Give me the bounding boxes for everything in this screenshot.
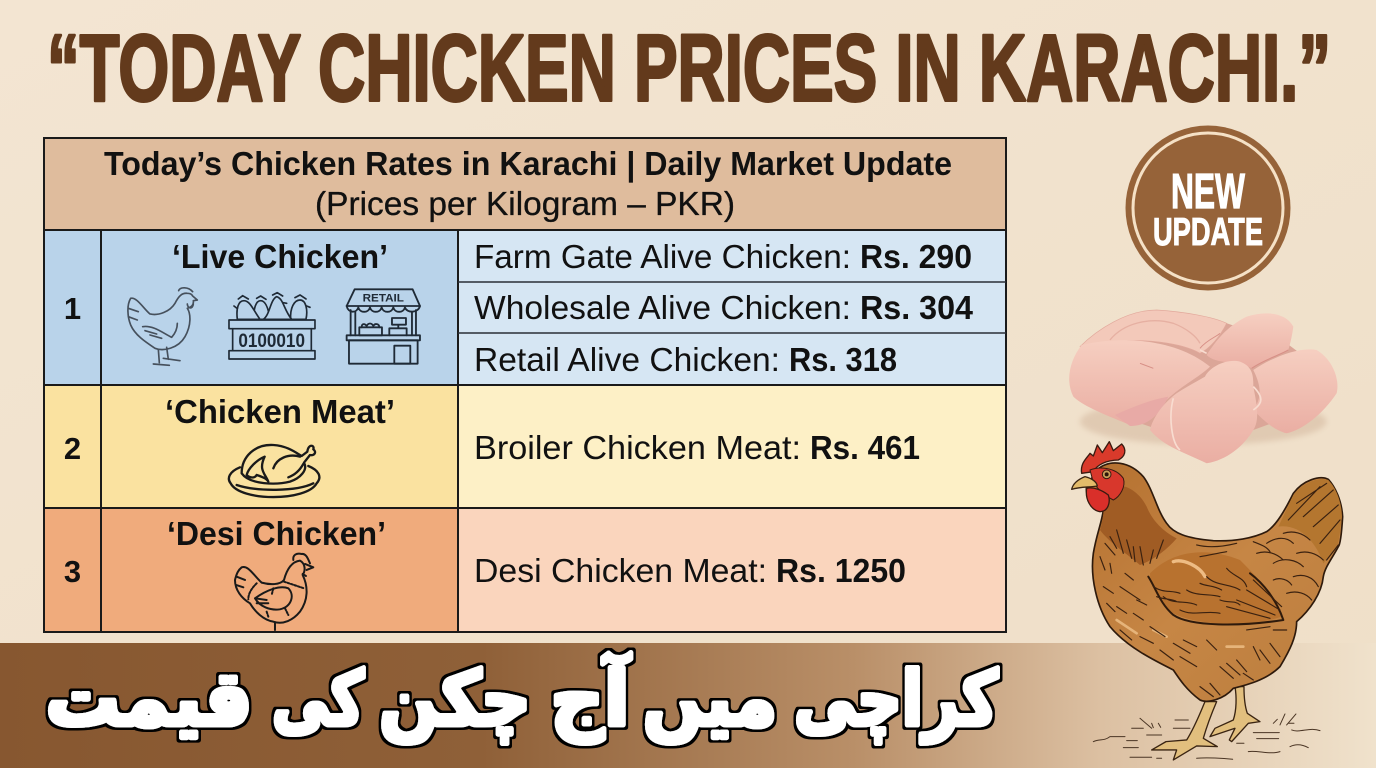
urdu banner heading: قیمت	[46, 655, 252, 743]
hen wattle	[1086, 488, 1109, 512]
icon: retail stall: RETAIL	[363, 293, 404, 305]
price: desi meat: Desi Chicken Meat:	[474, 552, 767, 589]
urdu banner heading: چکن	[379, 656, 531, 744]
price: wholesale alive: Rs. 304	[860, 289, 974, 326]
price: wholesale alive: Wholesale Alive Chicken:	[474, 289, 851, 326]
row 2: chicken meat	[44, 385, 1006, 508]
price: retail alive: Rs. 318	[789, 341, 897, 378]
hen legs	[1152, 687, 1260, 760]
row 1: live chicken	[44, 230, 1006, 385]
bottom banner background	[0, 643, 1376, 768]
table header	[44, 138, 1006, 230]
row 3: desi chicken: 3	[64, 554, 81, 589]
row 3: desi chicken	[44, 508, 1006, 632]
hen feather marks	[1100, 483, 1340, 697]
hen body	[1086, 463, 1343, 701]
price: broiler meat: Broiler Chicken Meat:	[474, 429, 801, 466]
hen neck shading	[1100, 485, 1177, 565]
image: raw chicken pieces	[1069, 310, 1337, 463]
urdu banner heading: آج	[551, 652, 632, 743]
row 3: desi chicken: ‘Desi Chicken’	[167, 515, 386, 552]
hen beak	[1072, 477, 1097, 489]
ground marks	[1093, 714, 1320, 759]
icon: roast chicken on plate	[229, 445, 319, 497]
hen tail shading	[1278, 479, 1342, 563]
hen comb	[1081, 442, 1125, 473]
row 2: chicken meat: ‘Chicken Meat’	[165, 393, 395, 430]
icon: retail stall	[347, 289, 420, 364]
urdu banner heading: میں	[643, 656, 777, 744]
price: desi meat: Rs. 1250	[776, 552, 906, 589]
icon: live hen	[128, 288, 197, 365]
hen back highlight	[1150, 552, 1282, 624]
price: farm gate alive: Rs. 290	[860, 238, 972, 275]
price: broiler meat: Rs. 461	[810, 429, 920, 466]
urdu banner heading	[46, 652, 999, 744]
price: retail alive: Retail Alive Chicken:	[474, 341, 780, 378]
price: desi meat	[474, 552, 906, 589]
hen wing outline	[1148, 573, 1283, 624]
hen face	[1090, 468, 1124, 500]
image: brown hen illustration	[1072, 442, 1343, 760]
row 1: live chicken: ‘Live Chicken’	[172, 238, 388, 275]
icon: crate of chickens: 0100010	[238, 331, 305, 352]
urdu banner heading: کراچی	[794, 656, 999, 744]
table header: Today’s Chicken Rates in Karachi | Daily Market Update	[104, 145, 952, 182]
badge: new update: NEW	[1171, 165, 1245, 219]
row 2: chicken meat: 2	[64, 431, 81, 466]
icon: desi hen outline	[235, 554, 313, 630]
price: farm gate alive: Farm Gate Alive Chicken:	[474, 238, 851, 275]
urdu banner heading: کی	[272, 655, 365, 743]
table header: (Prices per Kilogram – PKR)	[315, 185, 735, 222]
panel: price table	[44, 138, 1006, 632]
icon: crate of chickens	[229, 293, 315, 359]
row 1: live chicken: 1	[64, 291, 81, 326]
badge: new update	[1126, 126, 1290, 290]
hen eye	[1102, 470, 1111, 479]
badge: new update: UPDATE	[1153, 211, 1263, 254]
